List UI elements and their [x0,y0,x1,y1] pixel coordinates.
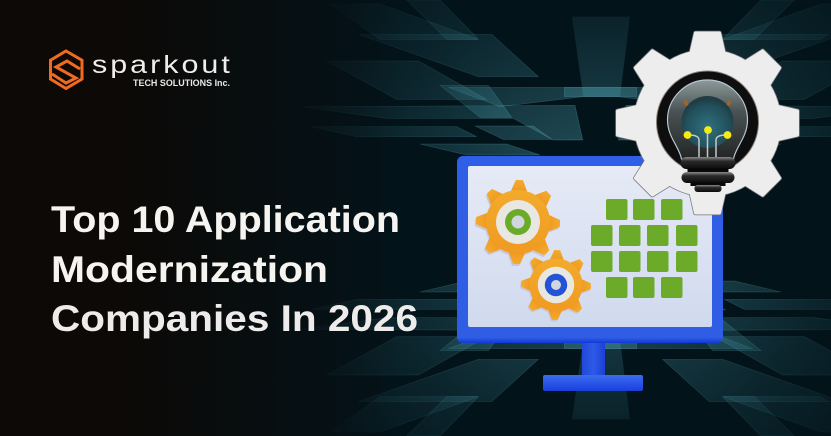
white gear [618,33,798,213]
monitor neck [582,343,605,377]
bulb glass [668,80,748,159]
bulb yellow dots [684,126,731,139]
black ring [656,71,758,173]
logo wordmark: sparkout [92,51,230,78]
icon: small orange gear [519,249,592,323]
icon: large orange gear [473,179,561,267]
title: Companies In 2026 [51,298,418,339]
monitor base [543,375,643,391]
green block grid [591,199,698,298]
icon: orange hexagon S mark [50,51,82,88]
bulb screw base [680,157,736,192]
title [51,199,418,339]
monitor frame [457,156,723,343]
logo tagline: TECH SOLUTIONS Inc. [133,78,230,89]
title: Modernization [51,249,328,290]
logo [50,51,230,89]
monitor illustration [457,156,723,391]
title: Top 10 Application [51,199,400,240]
monitor screen [468,166,712,327]
bulb filaments [688,130,726,158]
icon: white gear with light bulb [618,33,798,213]
